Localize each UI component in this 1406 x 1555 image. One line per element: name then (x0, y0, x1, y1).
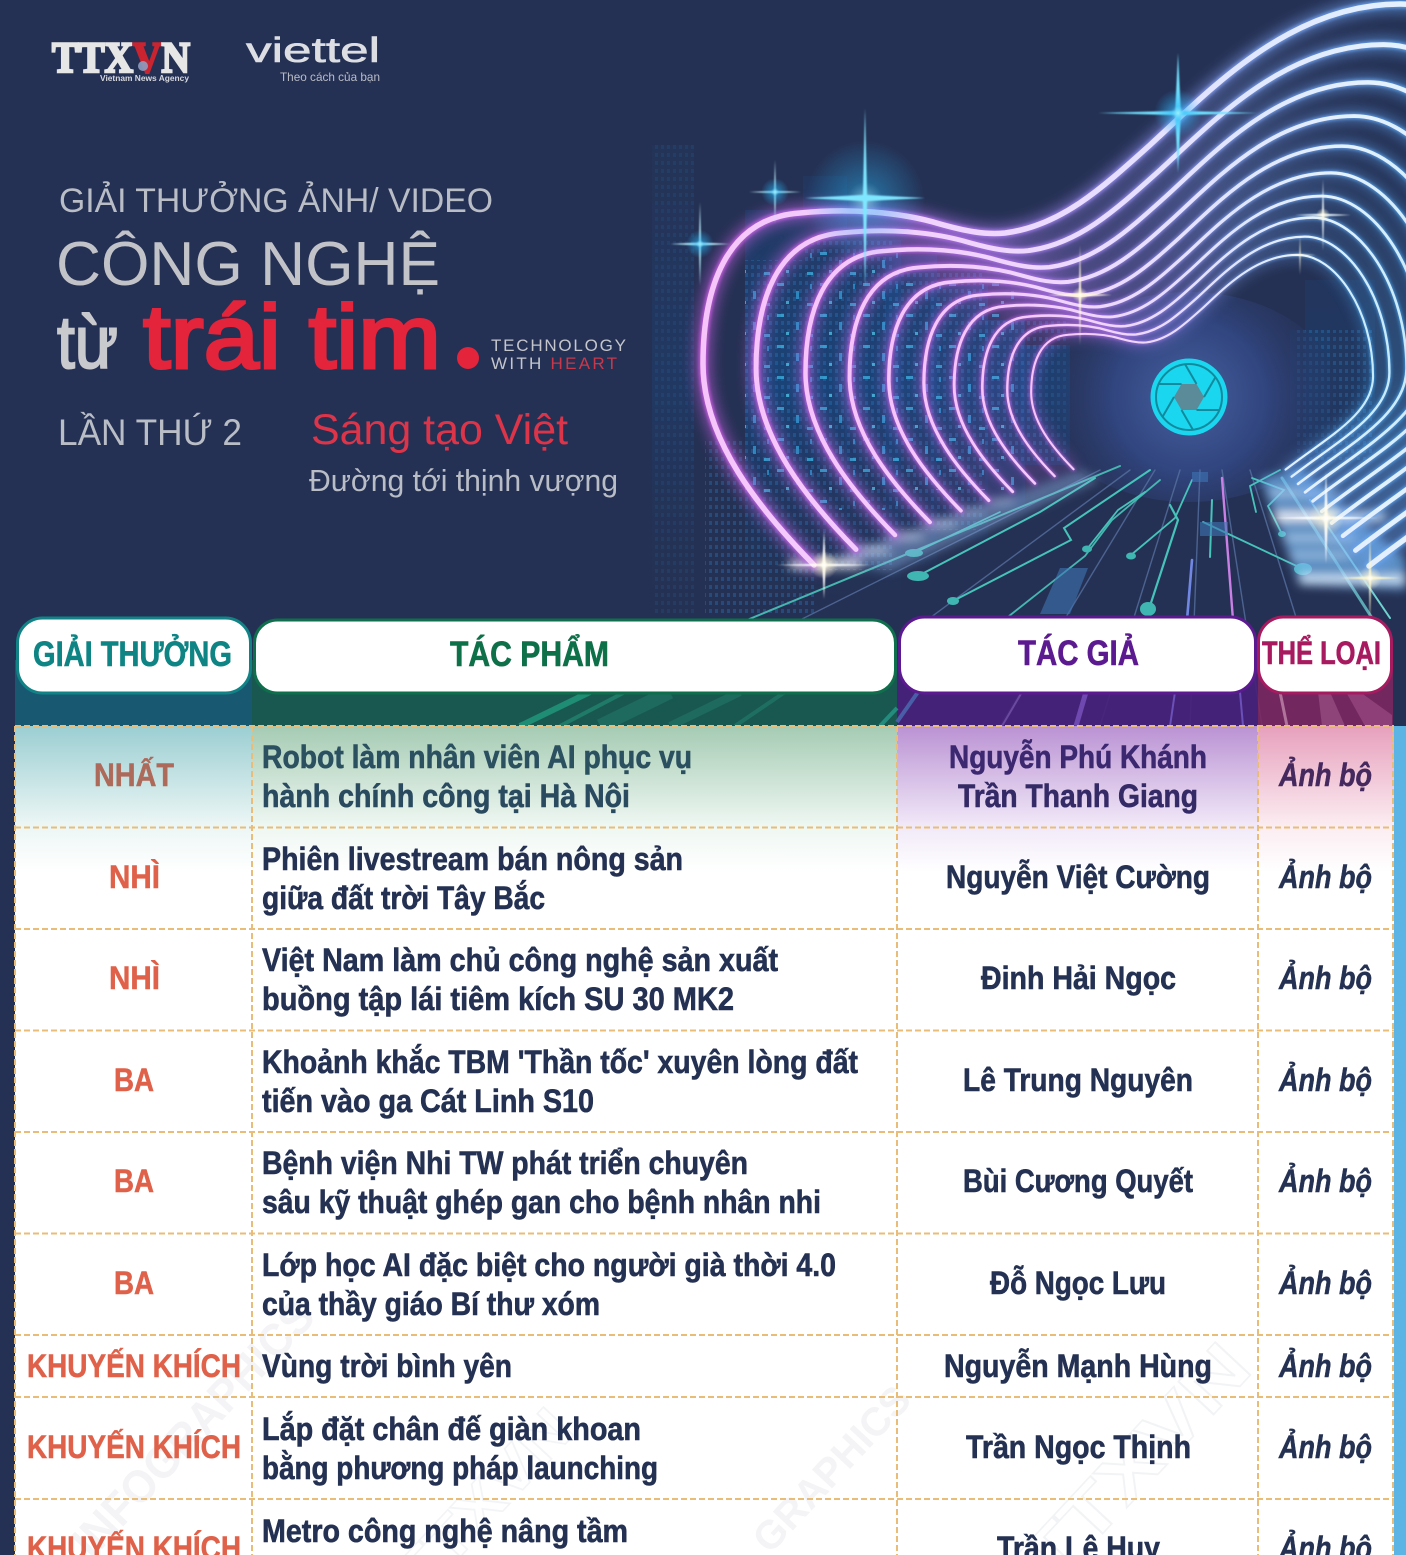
header: THỂ LOẠI (1258, 617, 1392, 693)
row 6: BA: Ảnh bộ (1278, 1264, 1372, 1301)
row 2: NHÌ: NHÌ (109, 858, 160, 895)
row 3: NHÌ: Đinh Hải Ngọc (981, 960, 1176, 996)
logo: viettel: Theo cách của bạn (280, 70, 380, 84)
row 6: BA: Lớp học AI đặc biệt cho người già thời 4.0 (262, 1247, 836, 1283)
row 1: NHẤT: Nguyễn Phú Khánh (949, 738, 1207, 775)
header: GIẢI THƯỞNG (18, 618, 250, 693)
row 6: BA (114, 1247, 1372, 1322)
row 5: BA (114, 1145, 1372, 1220)
row 6: BA: BA (114, 1265, 154, 1301)
row 7: KHUYẾN KHÍCH (27, 1347, 1372, 1384)
row 2: NHÌ (109, 841, 1372, 916)
row 5: BA: Bệnh viện Nhi TW phát triển chuyên (262, 1145, 748, 1181)
row 5: BA: sâu kỹ thuật ghép gan cho bệnh nhân nhi (262, 1184, 821, 1220)
header: GIẢI THƯỞNG: GIẢI THƯỞNG (33, 634, 232, 674)
row 8: KHUYẾN KHÍCH: Lắp đặt chân đế giàn khoan (262, 1410, 641, 1447)
row 3: NHÌ: buồng tập lái tiêm kích SU 30 MK2 (262, 981, 734, 1017)
table: column bands under header (15, 660, 1393, 726)
row 4: BA: Khoảnh khắc TBM 'Thần tốc' xuyên lòng đất (262, 1043, 858, 1080)
row 3: NHÌ: NHÌ (109, 959, 160, 996)
watermark (61, 1290, 1266, 1555)
row 6: BA: Đỗ Ngọc Lưu (990, 1264, 1166, 1301)
row 1: NHẤT: NHẤT (94, 756, 174, 793)
row 6: BA: của thầy giáo Bí thư xóm (262, 1286, 600, 1322)
row 9: KHUYẾN KHÍCH: Metro công nghệ nâng tầm (262, 1513, 628, 1549)
row 5: BA: Bùi Cương Quyết (963, 1163, 1193, 1199)
table: body panel (15, 726, 1394, 1555)
row 2: NHÌ: Nguyễn Việt Cường (946, 858, 1210, 895)
table: first row highlight (15, 726, 1394, 872)
row 8: KHUYẾN KHÍCH: Trần Ngọc Thịnh (966, 1429, 1191, 1465)
logo: viettel: viettel (246, 31, 380, 70)
header: TÁC PHẨM (254, 620, 896, 693)
row 8: KHUYẾN KHÍCH: Ảnh bộ (1278, 1428, 1372, 1465)
row 4: BA: tiến vào ga Cát Linh S10 (262, 1083, 594, 1119)
row 4: BA (114, 1043, 1372, 1119)
row 3: NHÌ: Việt Nam làm chủ công nghệ sản xuất (262, 942, 778, 978)
illustration: sparkling stars (670, 53, 1400, 622)
row 7: KHUYẾN KHÍCH: Ảnh bộ (1278, 1347, 1372, 1384)
row 1: NHẤT: hành chính công tại Hà Nội (262, 778, 630, 814)
illustration: circuit floor (747, 466, 1390, 726)
row 5: BA: Ảnh bộ (1278, 1162, 1372, 1199)
tagline: TECHNOLOGY (491, 336, 626, 355)
icon: camera aperture (1150, 358, 1228, 436)
logo: TTXVN: Vietnam News Agency (100, 73, 189, 83)
header: TÁC GIẢ: TÁC GIẢ (1018, 633, 1139, 673)
tagline: WITH HEART (491, 354, 617, 373)
title line: CÔNG NGHỆ: CÔNG NGHỆ (56, 230, 440, 299)
illustration: ground glow under neon waves (790, 468, 1406, 590)
right accent band (1394, 726, 1406, 1555)
row 9: KHUYẾN KHÍCH (27, 1513, 1372, 1555)
title line: trái tim: trái tim (143, 288, 441, 388)
header: TÁC PHẨM: TÁC PHẨM (450, 634, 609, 674)
row 2: NHÌ: Phiên livestream bán nông sản (262, 841, 683, 877)
theme: Sáng tạo Việt (311, 406, 568, 454)
tagline (491, 336, 626, 373)
row 2: NHÌ: Ảnh bộ (1278, 858, 1372, 895)
row 5: BA: BA (114, 1163, 154, 1199)
logo: TTXVN: TTXVN (52, 35, 190, 82)
logo: viettel (246, 31, 380, 84)
theme subtitle: Đường tới thịnh vượng (309, 463, 618, 498)
subtitle: GIẢI THƯỞNG ẢNH/ VIDEO (59, 182, 493, 220)
row 8: KHUYẾN KHÍCH: KHUYẾN KHÍCH (27, 1428, 241, 1465)
row 1: NHẤT: Robot làm nhân viên AI phục vụ (262, 739, 692, 775)
row 4: BA: Lê Trung Nguyên (963, 1062, 1193, 1098)
row 2: NHÌ: giữa đất trời Tây Bắc (262, 879, 545, 916)
row 1: NHẤT: Ảnh bộ (1278, 756, 1372, 793)
row 8: KHUYẾN KHÍCH (27, 1410, 1372, 1486)
row 3: NHÌ (109, 942, 1372, 1017)
row 7: KHUYẾN KHÍCH: Vùng trời bình yên (262, 1348, 512, 1384)
row 4: BA: BA (114, 1062, 154, 1098)
row 4: BA: Ảnh bộ (1278, 1061, 1372, 1098)
row 8: KHUYẾN KHÍCH: bằng phương pháp launching (262, 1449, 658, 1486)
illustration: tunnel glow (1039, 292, 1339, 502)
illustration: neon heart wave lines (703, 4, 1406, 566)
row 1: NHẤT (94, 738, 1372, 814)
row 7: KHUYẾN KHÍCH: KHUYẾN KHÍCH (27, 1347, 241, 1384)
row 7: KHUYẾN KHÍCH: Nguyễn Mạnh Hùng (944, 1347, 1212, 1384)
title dot (457, 347, 479, 369)
title line: từ: từ (57, 301, 118, 384)
row 3: NHÌ: Ảnh bộ (1278, 959, 1372, 996)
row 1: NHẤT: Trần Thanh Giang (958, 778, 1198, 814)
title block (56, 182, 626, 498)
edition: LẦN THỨ 2 (58, 412, 242, 453)
illustration: neon city skyline (652, 145, 1375, 615)
header: TÁC GIẢ (900, 617, 1256, 693)
